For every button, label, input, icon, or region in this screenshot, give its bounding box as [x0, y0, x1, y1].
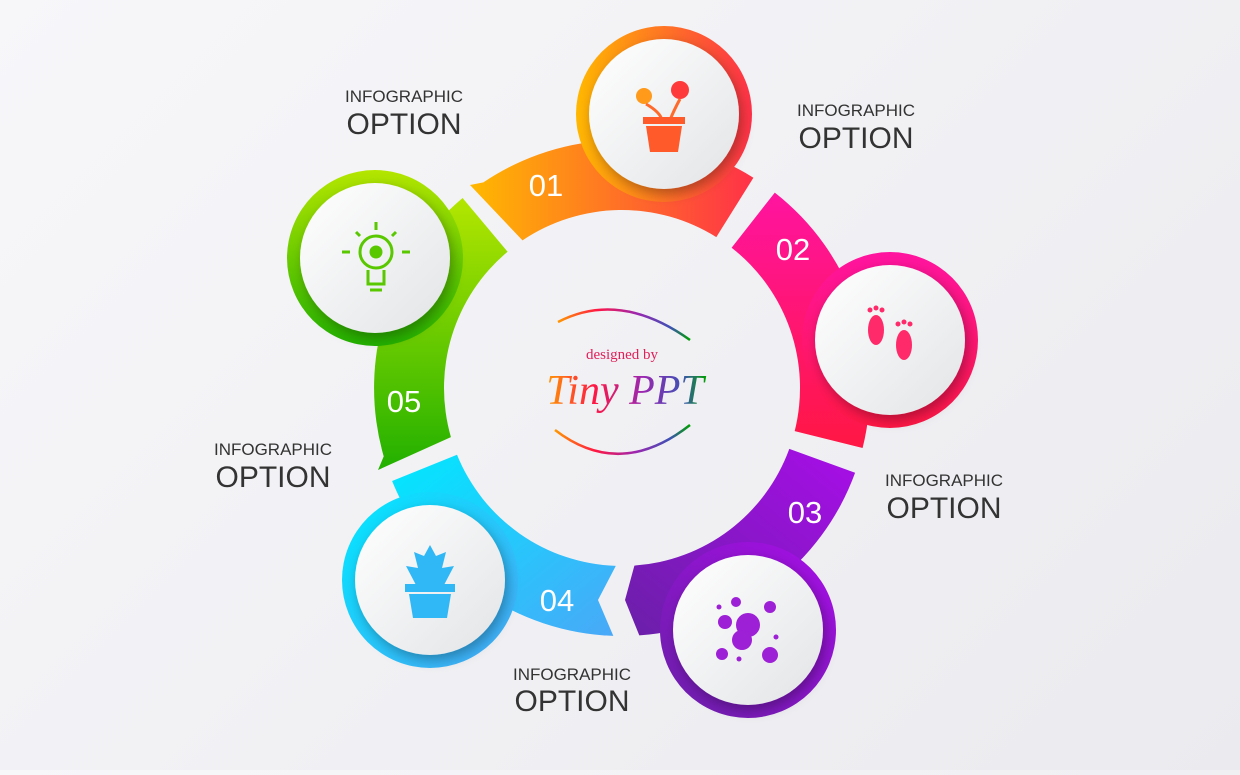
center logo: Tiny PPT	[546, 368, 706, 414]
circle 02	[802, 252, 978, 428]
center logo	[546, 310, 706, 454]
labels: INFOGRAPHIC	[214, 440, 332, 459]
ring segment 04	[392, 455, 616, 636]
icon: bubbles	[716, 597, 778, 663]
labels: OPTION	[346, 108, 462, 141]
icon: succulent	[405, 545, 455, 618]
circle 05	[287, 170, 463, 346]
ring segment 05	[374, 198, 508, 470]
ring segment 01	[470, 140, 753, 240]
numbers: 05	[387, 384, 421, 419]
numbers: 02	[776, 232, 810, 267]
labels: OPTION	[514, 685, 630, 718]
circle 01	[576, 26, 752, 202]
ring segment 03	[625, 449, 855, 635]
numbers	[387, 168, 822, 618]
numbers: 03	[788, 495, 822, 530]
labels: OPTION	[215, 461, 331, 494]
labels: OPTION	[798, 122, 914, 155]
labels	[214, 87, 1003, 718]
numbers: 01	[529, 168, 563, 203]
labels: INFOGRAPHIC	[797, 101, 915, 120]
labels: INFOGRAPHIC	[345, 87, 463, 106]
labels: OPTION	[886, 492, 1002, 525]
circle 03	[660, 542, 836, 718]
icon: bulb	[342, 222, 410, 290]
icon: feet	[868, 306, 912, 360]
numbers: 04	[540, 583, 574, 618]
center logo: designed by	[586, 347, 659, 363]
icon: flower pot	[636, 81, 689, 152]
labels: INFOGRAPHIC	[513, 665, 631, 684]
labels: INFOGRAPHIC	[885, 471, 1003, 490]
ring segment 02	[732, 193, 870, 448]
circle 04	[342, 492, 518, 668]
